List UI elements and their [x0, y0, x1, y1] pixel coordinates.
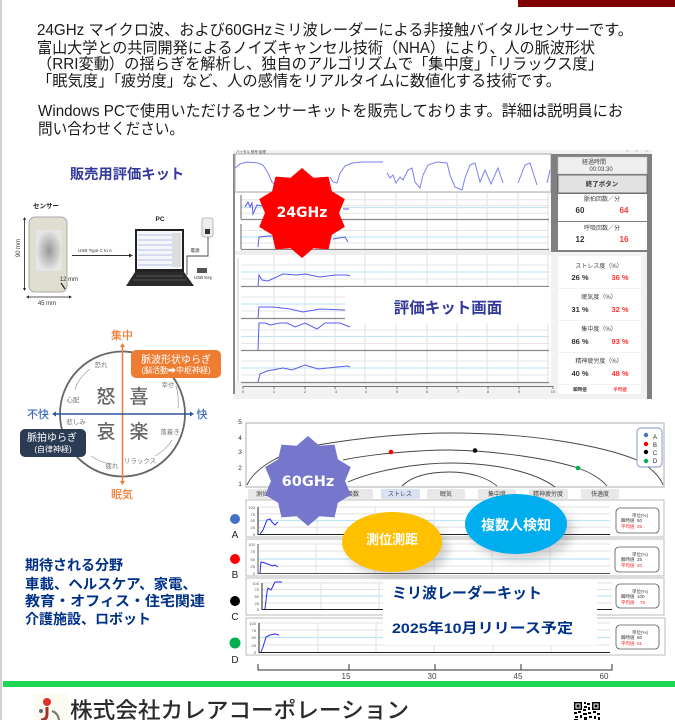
side readouts — [551, 154, 652, 399]
power adapter and USB key — [187, 218, 213, 280]
emotion words: 疲れ — [106, 461, 119, 470]
row B: 50 — [251, 557, 256, 562]
arc chart: 5 — [238, 419, 242, 426]
emotion words: 悲しみ — [66, 417, 86, 426]
row C: 75 — [640, 600, 646, 605]
side readouts: 93 % — [611, 337, 629, 346]
sensor — [16, 202, 78, 307]
legend: A — [653, 435, 657, 441]
emotion words: 落着き — [160, 427, 180, 436]
arc chart: 1 — [238, 481, 242, 488]
side readouts: 呼吸回数／分 — [584, 224, 620, 232]
quadrant kanji: 怒 — [96, 386, 116, 408]
panel: 60GHz radar screen — [230, 419, 665, 681]
QR code — [574, 702, 600, 720]
side readouts: 眠気度（%） — [581, 293, 617, 301]
emotion quadrant diagram — [20, 328, 221, 501]
row B: 20 — [637, 563, 643, 568]
intro text block: Windows PCで使用いただけるセンサーキットを販売しております。詳細は説明員にお — [38, 102, 623, 120]
row B: 0 — [253, 571, 256, 576]
time axis: 10 — [551, 389, 556, 394]
row C: 瞬時値 — [621, 593, 635, 600]
row A: 平均値 — [621, 523, 635, 530]
callout: release notice: 2025年10月リリース予定 — [392, 620, 573, 636]
row C: 0 — [257, 607, 260, 612]
metric tabs: 精神疲労度 — [533, 490, 563, 498]
row A: 100 — [248, 505, 256, 510]
intro text block: 「眠気度」「疲労度」など、人の感情をリアルタイムに数値化する技術です。 — [37, 72, 561, 90]
arc chart — [238, 419, 664, 488]
row B: 25 — [251, 564, 256, 569]
callout: pulse wave shape: (脳活動➡中枢神経) — [141, 365, 211, 375]
row C — [230, 578, 664, 623]
side readouts: 36 % — [611, 273, 629, 282]
row C: 100 — [637, 594, 645, 599]
callout: release notice: ミリ波レーダーキット — [392, 584, 542, 602]
row B: 75 — [251, 549, 256, 554]
row D: D — [231, 655, 239, 666]
axes: 不快 — [27, 407, 49, 421]
expected fields text: 期待される分野 — [25, 557, 123, 573]
side readouts: 16 — [620, 235, 629, 244]
row D: 単位(%) — [632, 629, 648, 636]
side readouts: 26 % — [571, 273, 589, 282]
footer green bar — [3, 681, 675, 687]
sensor: 90 mm — [16, 239, 22, 257]
row B: B — [232, 570, 239, 581]
time axis: 1 — [273, 389, 276, 394]
row D: 平均値 — [621, 640, 635, 647]
callout: pulse rate — [20, 429, 86, 457]
legend — [637, 428, 662, 467]
row C: C — [231, 612, 239, 623]
callout: pulse wave shape — [131, 350, 221, 378]
time axis: 0 — [242, 389, 245, 394]
side readouts: 集中度（%） — [581, 325, 617, 333]
quadrant kanji: 喜 — [129, 386, 149, 408]
row A: 50 — [637, 518, 643, 523]
row D: 60 — [637, 635, 643, 640]
time axis: 3 — [335, 389, 338, 394]
oval: positioning and ranging — [342, 512, 448, 578]
quadrant kanji — [96, 386, 149, 443]
emotion words: リラックス — [124, 457, 156, 465]
emotion words — [66, 361, 180, 470]
company logo — [34, 694, 68, 720]
person rows — [230, 500, 665, 666]
row A: 35 — [637, 524, 643, 529]
row B — [230, 539, 664, 581]
row C: 50 — [255, 594, 260, 599]
arc chart: 2 — [238, 465, 242, 472]
metric tabs: 眠気 — [440, 490, 452, 498]
side readouts: 40 % — [571, 369, 589, 378]
side readouts: 48 % — [611, 369, 629, 378]
time series charts — [235, 193, 551, 382]
emotion words: 幸せ — [162, 381, 174, 389]
time axis: 6 — [426, 389, 429, 394]
row B: 25 — [637, 557, 643, 562]
emotion words: 心配 — [66, 395, 80, 404]
row C: 単位(%) — [632, 588, 648, 595]
row D — [230, 618, 665, 666]
kit diagram — [16, 202, 213, 307]
row A: 25 — [251, 525, 256, 530]
USB cable arrow: USB Type C to A — [78, 248, 112, 253]
metric tabs — [248, 489, 619, 499]
side readouts: 精神疲労度（%） — [575, 357, 623, 365]
row A: 50 — [251, 518, 256, 523]
row D: 25 — [252, 643, 257, 648]
metric tabs: 測位 — [256, 490, 268, 498]
row D: 75 — [252, 628, 257, 633]
axes: 快 — [196, 407, 208, 421]
expected fields text: 車載、ヘルスケア、家電、 — [25, 576, 197, 592]
time axis: 7 — [457, 389, 460, 394]
small direction arcs — [75, 369, 178, 464]
row D: 瞬時値 — [621, 634, 635, 641]
row B: 平均値 — [621, 562, 635, 569]
intro text block: 問い合わせください。 — [38, 120, 184, 138]
sensor: 45 mm — [38, 301, 56, 307]
row C: 平均値 — [621, 599, 635, 606]
power adapter and USB key: USB Key — [194, 275, 213, 280]
row B: 単位(%) — [632, 551, 648, 558]
row B: 瞬時値 — [621, 556, 635, 563]
side readouts: 瞬時値 — [573, 386, 587, 393]
badge: 24GHz — [259, 168, 345, 258]
side readouts: 終了ボタン — [586, 179, 619, 188]
time axis — [258, 664, 612, 681]
row A: 75 — [251, 512, 256, 517]
badge: 24GHz: 24GHz — [277, 205, 327, 221]
row A: 瞬時値 — [621, 517, 635, 524]
emotion words: 恐れ — [94, 361, 108, 369]
top right accent bar — [518, 0, 675, 7]
arc chart: 4 — [238, 435, 242, 442]
time axis: 4 — [365, 389, 368, 394]
axes: 眠気 — [111, 487, 133, 501]
waveform chart — [235, 154, 551, 192]
metric tabs: ストレス — [388, 491, 412, 498]
side readouts: 60 — [576, 206, 585, 215]
row D: 51 — [637, 641, 643, 646]
expected fields text: 介護施設、ロボット — [25, 611, 151, 627]
arc chart: 3 — [238, 449, 242, 456]
side readouts: 32 % — [611, 305, 629, 314]
oval: positioning and ranging: 測位測距 — [366, 532, 418, 547]
panel: 24GHz evaluation screen: バイタル 信号 処理 — [236, 149, 266, 154]
badge: 60GHz — [265, 436, 351, 526]
side readouts: ストレス度（%） — [575, 262, 623, 270]
time axis: 45 — [514, 672, 523, 681]
power adapter and USB key: 電源 — [190, 247, 200, 254]
side readouts: 00:03:30 — [589, 167, 613, 173]
metric tabs: 快適度 — [591, 490, 609, 498]
intro text block: 24GHz マイクロ波、および60GHzミリ波レーダーによる非接触バイタルセンサーです。 — [37, 21, 633, 39]
label: evaluation kit screen: 評価キット画面 — [394, 299, 502, 317]
side readouts: 64 — [620, 206, 629, 215]
sensor: 12 mm — [60, 277, 78, 283]
laptop PC — [126, 216, 194, 286]
laptop PC: PC — [155, 216, 165, 223]
metric tabs: 集中度 — [488, 490, 506, 498]
expected fields text — [25, 557, 205, 627]
row C: 25 — [255, 601, 260, 606]
legend: B — [653, 443, 657, 449]
time axis — [242, 386, 556, 394]
intro text block — [37, 21, 633, 138]
quadrant kanji: 楽 — [129, 421, 149, 443]
row A — [230, 500, 664, 541]
side readouts: 31 % — [571, 305, 589, 314]
time axis: 60 — [600, 672, 609, 681]
callout: release notice — [383, 580, 597, 645]
callout: pulse rate: (自律神経) — [34, 444, 72, 454]
row C: 100 — [252, 581, 260, 586]
axes: 集中 — [111, 328, 133, 342]
time axis: 30 — [428, 672, 437, 681]
side readouts: 12 — [576, 235, 585, 244]
side readouts: 平均値 — [613, 386, 627, 393]
label: evaluation kit screen — [345, 287, 550, 323]
row D: 0 — [254, 650, 257, 655]
row A: 0 — [253, 532, 256, 537]
time axis: 15 — [342, 672, 351, 681]
intro text block: （RRI変動）の揺らぎを解析し、独自のアルゴリズムで「集中度」「リラックス度」 — [37, 54, 603, 73]
time axis: 9 — [518, 389, 521, 394]
legend: D — [653, 459, 658, 465]
oval: multi-person detection — [465, 494, 573, 560]
row A: A — [232, 530, 239, 541]
panel: 24GHz evaluation screen — [233, 149, 652, 399]
legend: C — [653, 451, 658, 457]
row B: 100 — [248, 542, 256, 547]
axes — [27, 328, 208, 501]
row D: 50 — [252, 635, 257, 640]
heading: evaluation kit: 販売用評価キット — [70, 166, 184, 183]
side readouts: 脈拍回数／分 — [584, 195, 620, 203]
oval: multi-person detection: 複数人検知 — [481, 517, 551, 533]
row C: 75 — [255, 587, 260, 592]
row A: 単位(%) — [632, 512, 648, 519]
time axis: 2 — [304, 389, 307, 394]
sensor: センサー — [33, 202, 59, 210]
row D: 100 — [249, 621, 257, 626]
metric tabs: 呼吸数 — [341, 490, 359, 498]
side readouts: 86 % — [571, 337, 589, 346]
quadrant kanji: 哀 — [96, 421, 116, 443]
callout: pulse rate: 脈拍ゆらぎ — [27, 431, 77, 444]
expected fields text: 教育・オフィス・住宅関連 — [25, 593, 205, 609]
USB cable arrow — [72, 248, 133, 258]
badge: 60GHz: 60GHz — [282, 474, 334, 490]
time axis: 8 — [487, 389, 490, 394]
intro text block: 富山大学との共同開発によるノイズキャンセル技術（NHA）により、人の脈波形状 — [37, 39, 595, 57]
callout: pulse wave shape: 脈波形状ゆらぎ — [141, 353, 211, 366]
time axis: 5 — [396, 389, 399, 394]
side readouts: 経過時間 — [582, 158, 606, 166]
